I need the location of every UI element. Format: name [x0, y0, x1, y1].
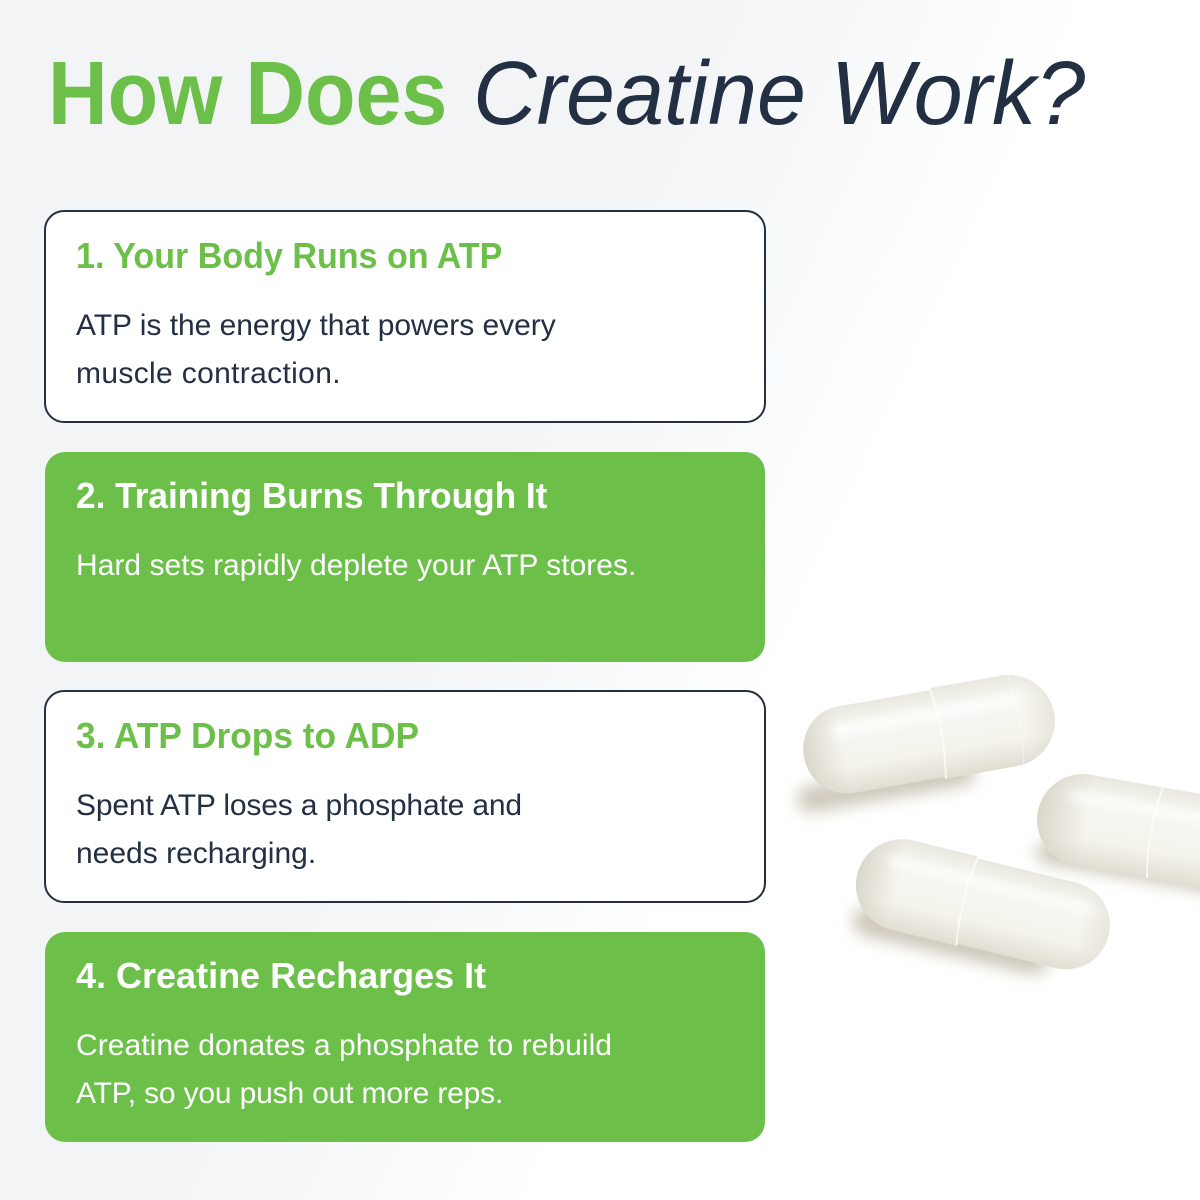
title: green part: How Does — [48, 44, 447, 144]
step 1 text — [76, 309, 556, 390]
step 3 text: Spent ATP loses a phosphate and — [76, 789, 522, 822]
step 4 text — [76, 1029, 612, 1110]
panel: step 1 — [44, 210, 766, 423]
title — [48, 44, 1085, 144]
panel: step 2 — [45, 452, 765, 662]
step 3 text: needs recharging. — [76, 837, 316, 870]
panel: step 4 — [45, 932, 765, 1142]
step 2 heading: 2. Training Burns Through It — [76, 475, 547, 516]
step 4 text: Creatine donates a phosphate to rebuild — [76, 1029, 612, 1062]
step 1 text: ATP is the energy that powers every — [76, 309, 556, 342]
step 1 heading: 1. Your Body Runs on ATP — [76, 235, 502, 276]
capsule shadows — [795, 757, 1200, 977]
step 4 heading: 4. Creatine Recharges It — [76, 955, 486, 996]
step 1 text: muscle contraction. — [76, 357, 341, 390]
capsules illustration — [790, 675, 1200, 982]
step 2 text: Hard sets rapidly deplete your ATP stores. — [76, 549, 636, 582]
capsule 1 — [796, 668, 1062, 802]
title: dark italic part: Creatine Work? — [473, 44, 1085, 144]
step 3 text — [76, 789, 522, 870]
capsule 2 — [846, 829, 1120, 981]
step 4 text: ATP, so you push out more reps. — [76, 1077, 503, 1110]
capsule 3 — [1030, 767, 1200, 913]
step 3 heading: 3. ATP Drops to ADP — [76, 715, 419, 756]
panel: step 3 — [44, 690, 766, 903]
